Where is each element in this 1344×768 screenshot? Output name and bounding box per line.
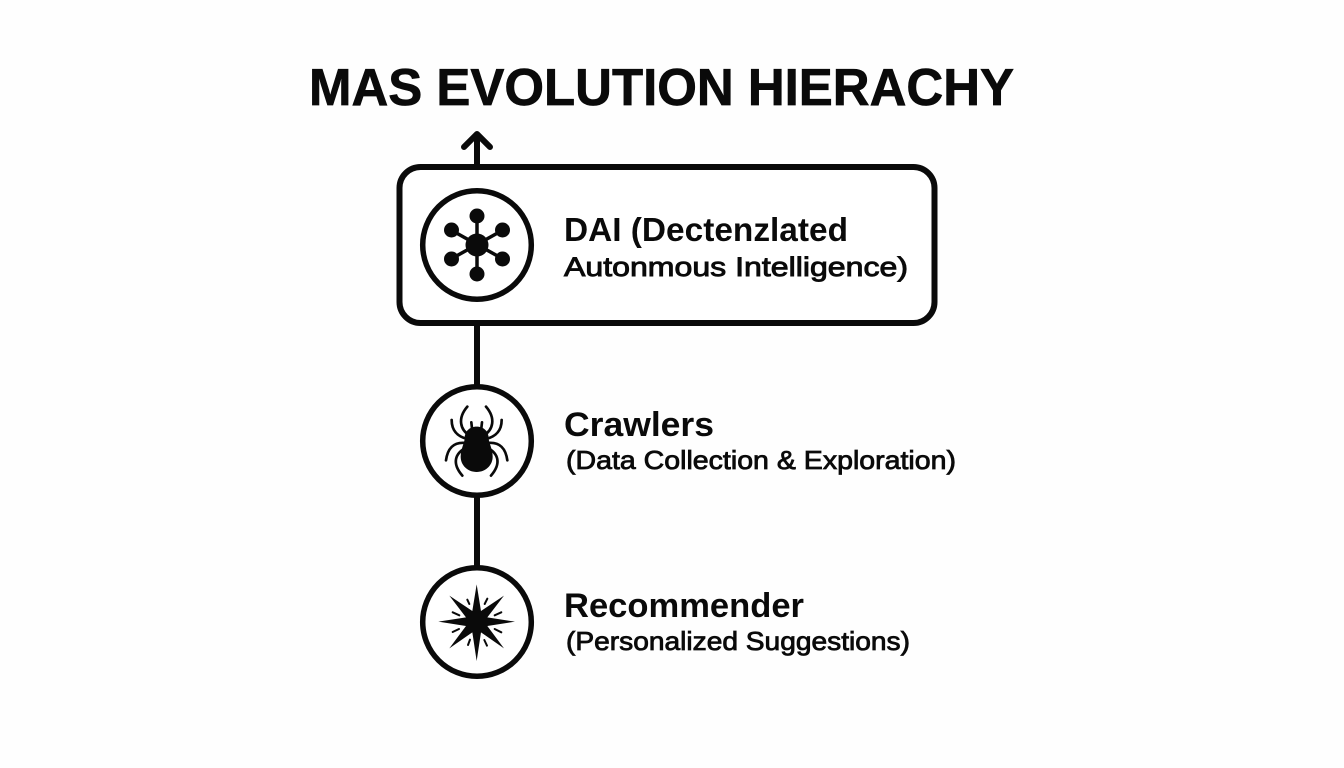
label: Recommender subheading: (Personalized Suggestions)	[566, 626, 910, 656]
title: MAS EVOLUTION HIERACHY	[309, 59, 1014, 117]
tier: Recommender	[423, 568, 910, 676]
icon: network hub	[423, 191, 531, 299]
tier: Crawlers	[423, 387, 956, 495]
label: Crawlers heading: Crawlers	[564, 406, 714, 444]
label: Recommender heading: Recommender	[564, 587, 804, 625]
icon: spider	[423, 387, 531, 495]
panel border	[400, 167, 934, 323]
label: DAI subheading: Autonmous Intelligence)	[564, 252, 908, 282]
panel: DAI tier	[400, 167, 934, 323]
arrow: upward evolution	[464, 134, 490, 164]
connector: Crawlers to Recommender	[474, 496, 480, 566]
label: Crawlers subheading: (Data Collection & Exploration)	[566, 445, 956, 475]
spider body	[461, 427, 493, 472]
icon: starburst	[423, 568, 531, 676]
label: DAI heading: DAI (Dectenzlated	[564, 211, 848, 248]
connector: DAI to Crawlers	[474, 325, 480, 385]
